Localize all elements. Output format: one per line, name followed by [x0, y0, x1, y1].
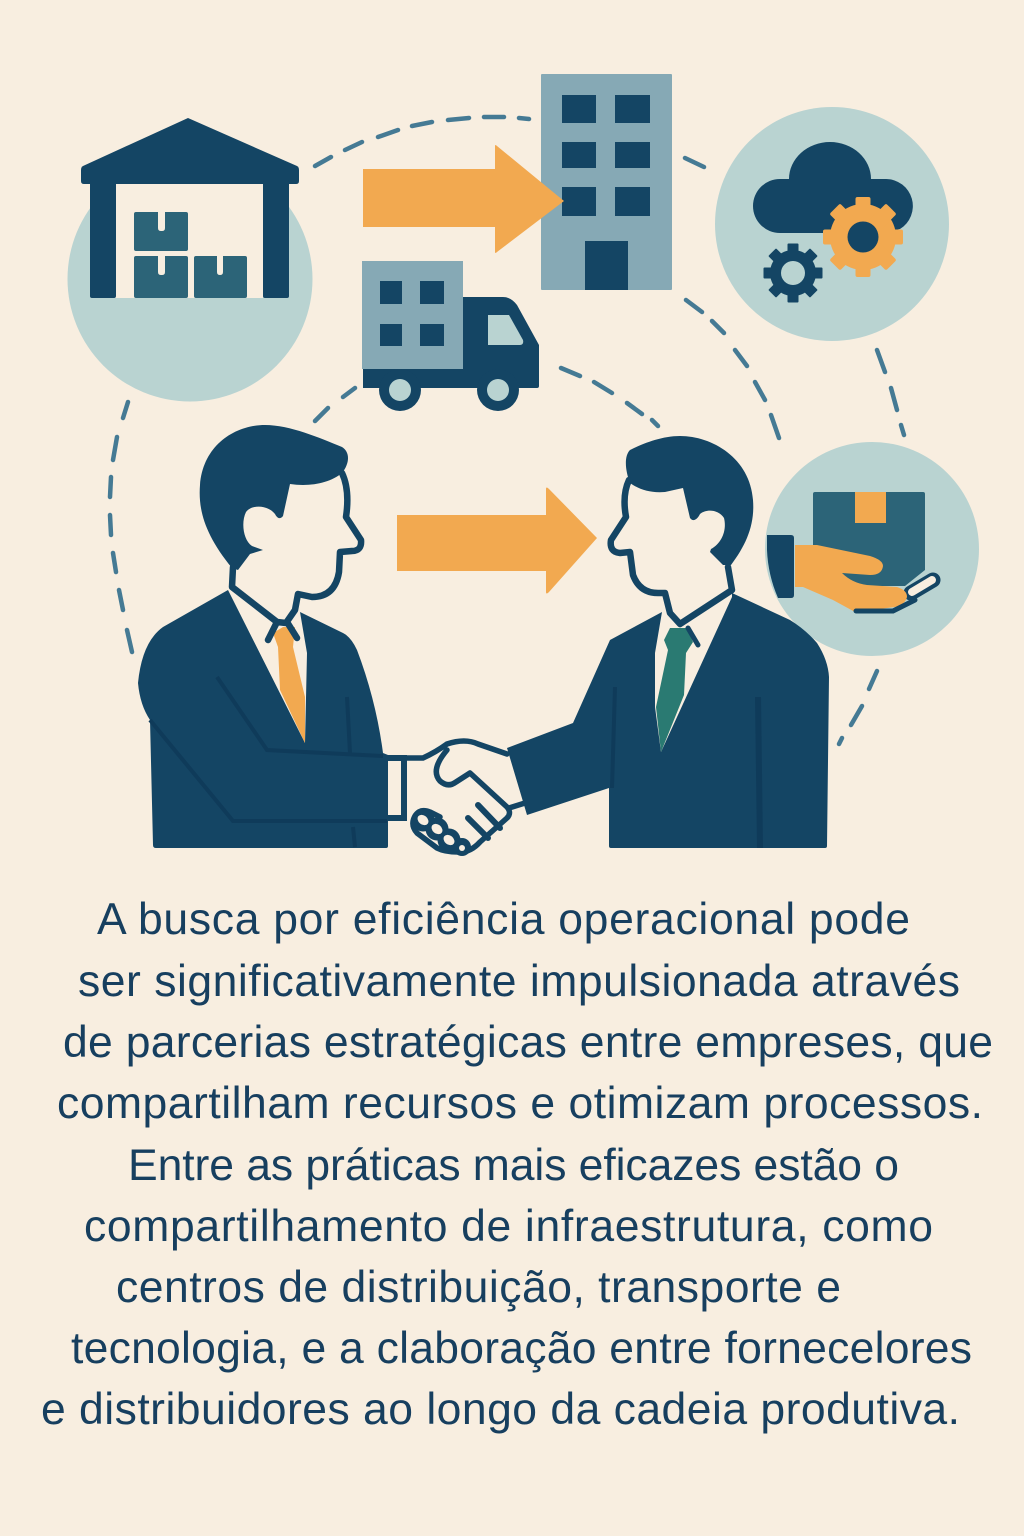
body text: tecnologia, e a claboração entre fornecelores [71, 1324, 972, 1373]
icon: hand holding package [765, 442, 979, 656]
dashed network connections [110, 117, 904, 744]
left shirt and tie [273, 627, 305, 743]
left face and collar outline [232, 473, 361, 640]
body text: compartilhamento de infraestrutura, como [84, 1202, 933, 1251]
icon: office building [541, 74, 672, 290]
right face and collar outline [611, 480, 732, 624]
left jacket [138, 590, 388, 848]
body text: centros de distribuição, transporte e [116, 1263, 841, 1312]
body text [41, 895, 993, 1434]
body text: Entre as práticas mais eficazes estão o [128, 1141, 899, 1190]
handshake [388, 741, 525, 856]
body text: ser significativamente impulsionada através [78, 957, 960, 1006]
right hair [626, 436, 753, 565]
right jacket fold lines [612, 687, 615, 788]
figure: left businessman [138, 425, 388, 848]
body text: e distribuidores ao longo da cadeia produtiva. [41, 1385, 960, 1434]
body text: A busca por eficiência operacional pode [97, 895, 910, 944]
arrow: to building [363, 145, 564, 253]
icon: warehouse [68, 118, 312, 402]
figure: right businessman [507, 436, 829, 848]
left jacket fold lines [150, 677, 387, 847]
icon: cloud with gears [715, 107, 949, 341]
left shirt cuff [388, 758, 404, 818]
right jacket seam [758, 697, 760, 848]
icon: delivery truck [362, 261, 539, 411]
body text: compartilham recursos e otimizam processos. [57, 1079, 983, 1128]
right collar line [688, 628, 698, 645]
body text: de parcerias estratégicas entre empreses, que [63, 1018, 993, 1067]
right tie [656, 628, 693, 752]
right jacket [507, 593, 829, 848]
left hair [200, 425, 348, 570]
arrow: between partners [397, 488, 597, 594]
handshake fingers [412, 808, 471, 856]
